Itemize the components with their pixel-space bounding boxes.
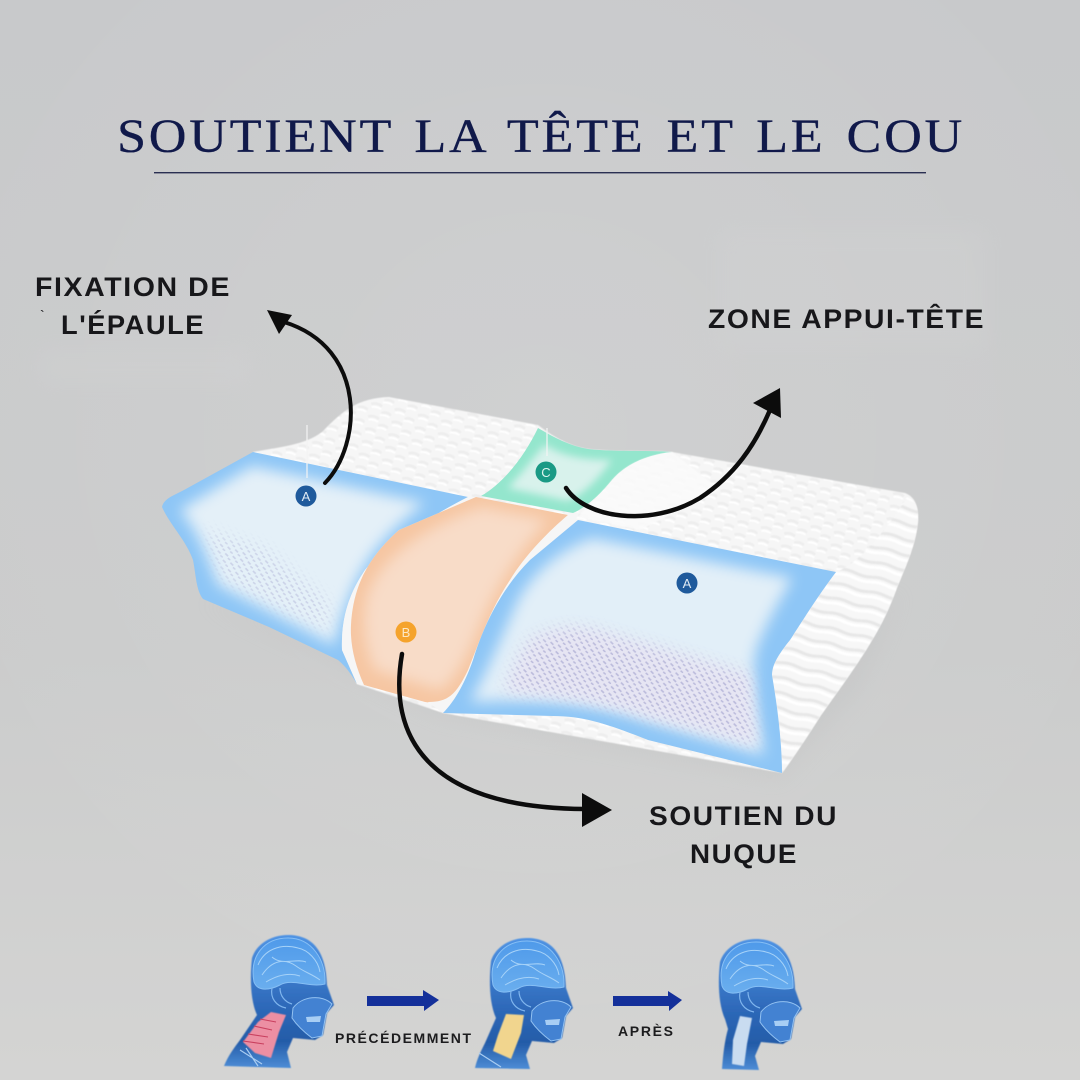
label: soutien du nuque: SOUTIEN DU <box>649 801 838 831</box>
title: SOUTIENT LA TÊTE ET LE COU <box>117 110 965 163</box>
badge C <box>536 462 556 482</box>
head before: red spine <box>224 935 334 1068</box>
pillow white body <box>253 397 918 773</box>
right blue zone <box>440 515 840 777</box>
arrow: during to after <box>613 991 682 1011</box>
orange zone B <box>350 497 568 702</box>
label: soutien du nuque <box>649 801 838 869</box>
pillow illustration <box>150 397 918 780</box>
arrow: to neck label <box>399 654 612 827</box>
pillow shadow <box>200 590 900 780</box>
pillow side face <box>772 497 918 773</box>
label: fixation de l'épaule: L'ÉPAULE <box>61 309 205 340</box>
label: fixation de l'épaule: FIXATION DE <box>35 272 231 302</box>
white separator strip, right <box>428 515 578 713</box>
left blue zone <box>162 452 468 683</box>
label: zone appui-tête: ZONE APPUI-TÊTE <box>708 303 985 334</box>
white dome next to green <box>578 452 720 530</box>
white separator strip, left <box>342 497 476 685</box>
badge A left: A <box>302 489 311 504</box>
label: précédemment: PRÉCÉDEMMENT <box>335 1030 471 1046</box>
arrow: to shoulder label <box>267 310 351 483</box>
head during: yellow spine <box>475 938 573 1069</box>
label: fixation de l'épaule <box>35 272 231 340</box>
head after: healthy spine <box>719 939 802 1070</box>
badge C: C <box>541 465 551 480</box>
badge B: B <box>402 625 410 640</box>
faint vertical lines <box>307 425 547 478</box>
green zone C <box>481 428 671 513</box>
badge A left <box>296 486 316 506</box>
badge A right: A <box>683 576 692 591</box>
title underline <box>154 172 926 173</box>
arrow: to head zone label <box>566 388 781 516</box>
badge A right <box>676 572 698 594</box>
badge B <box>396 622 416 642</box>
infographic canvas <box>36 110 982 1070</box>
label: après: APRÈS <box>618 1023 673 1039</box>
arrow: before to during <box>367 990 439 1011</box>
label: soutien du nuque: NUQUE <box>690 839 798 869</box>
label: fixation de l'épaule: ` <box>40 307 45 323</box>
